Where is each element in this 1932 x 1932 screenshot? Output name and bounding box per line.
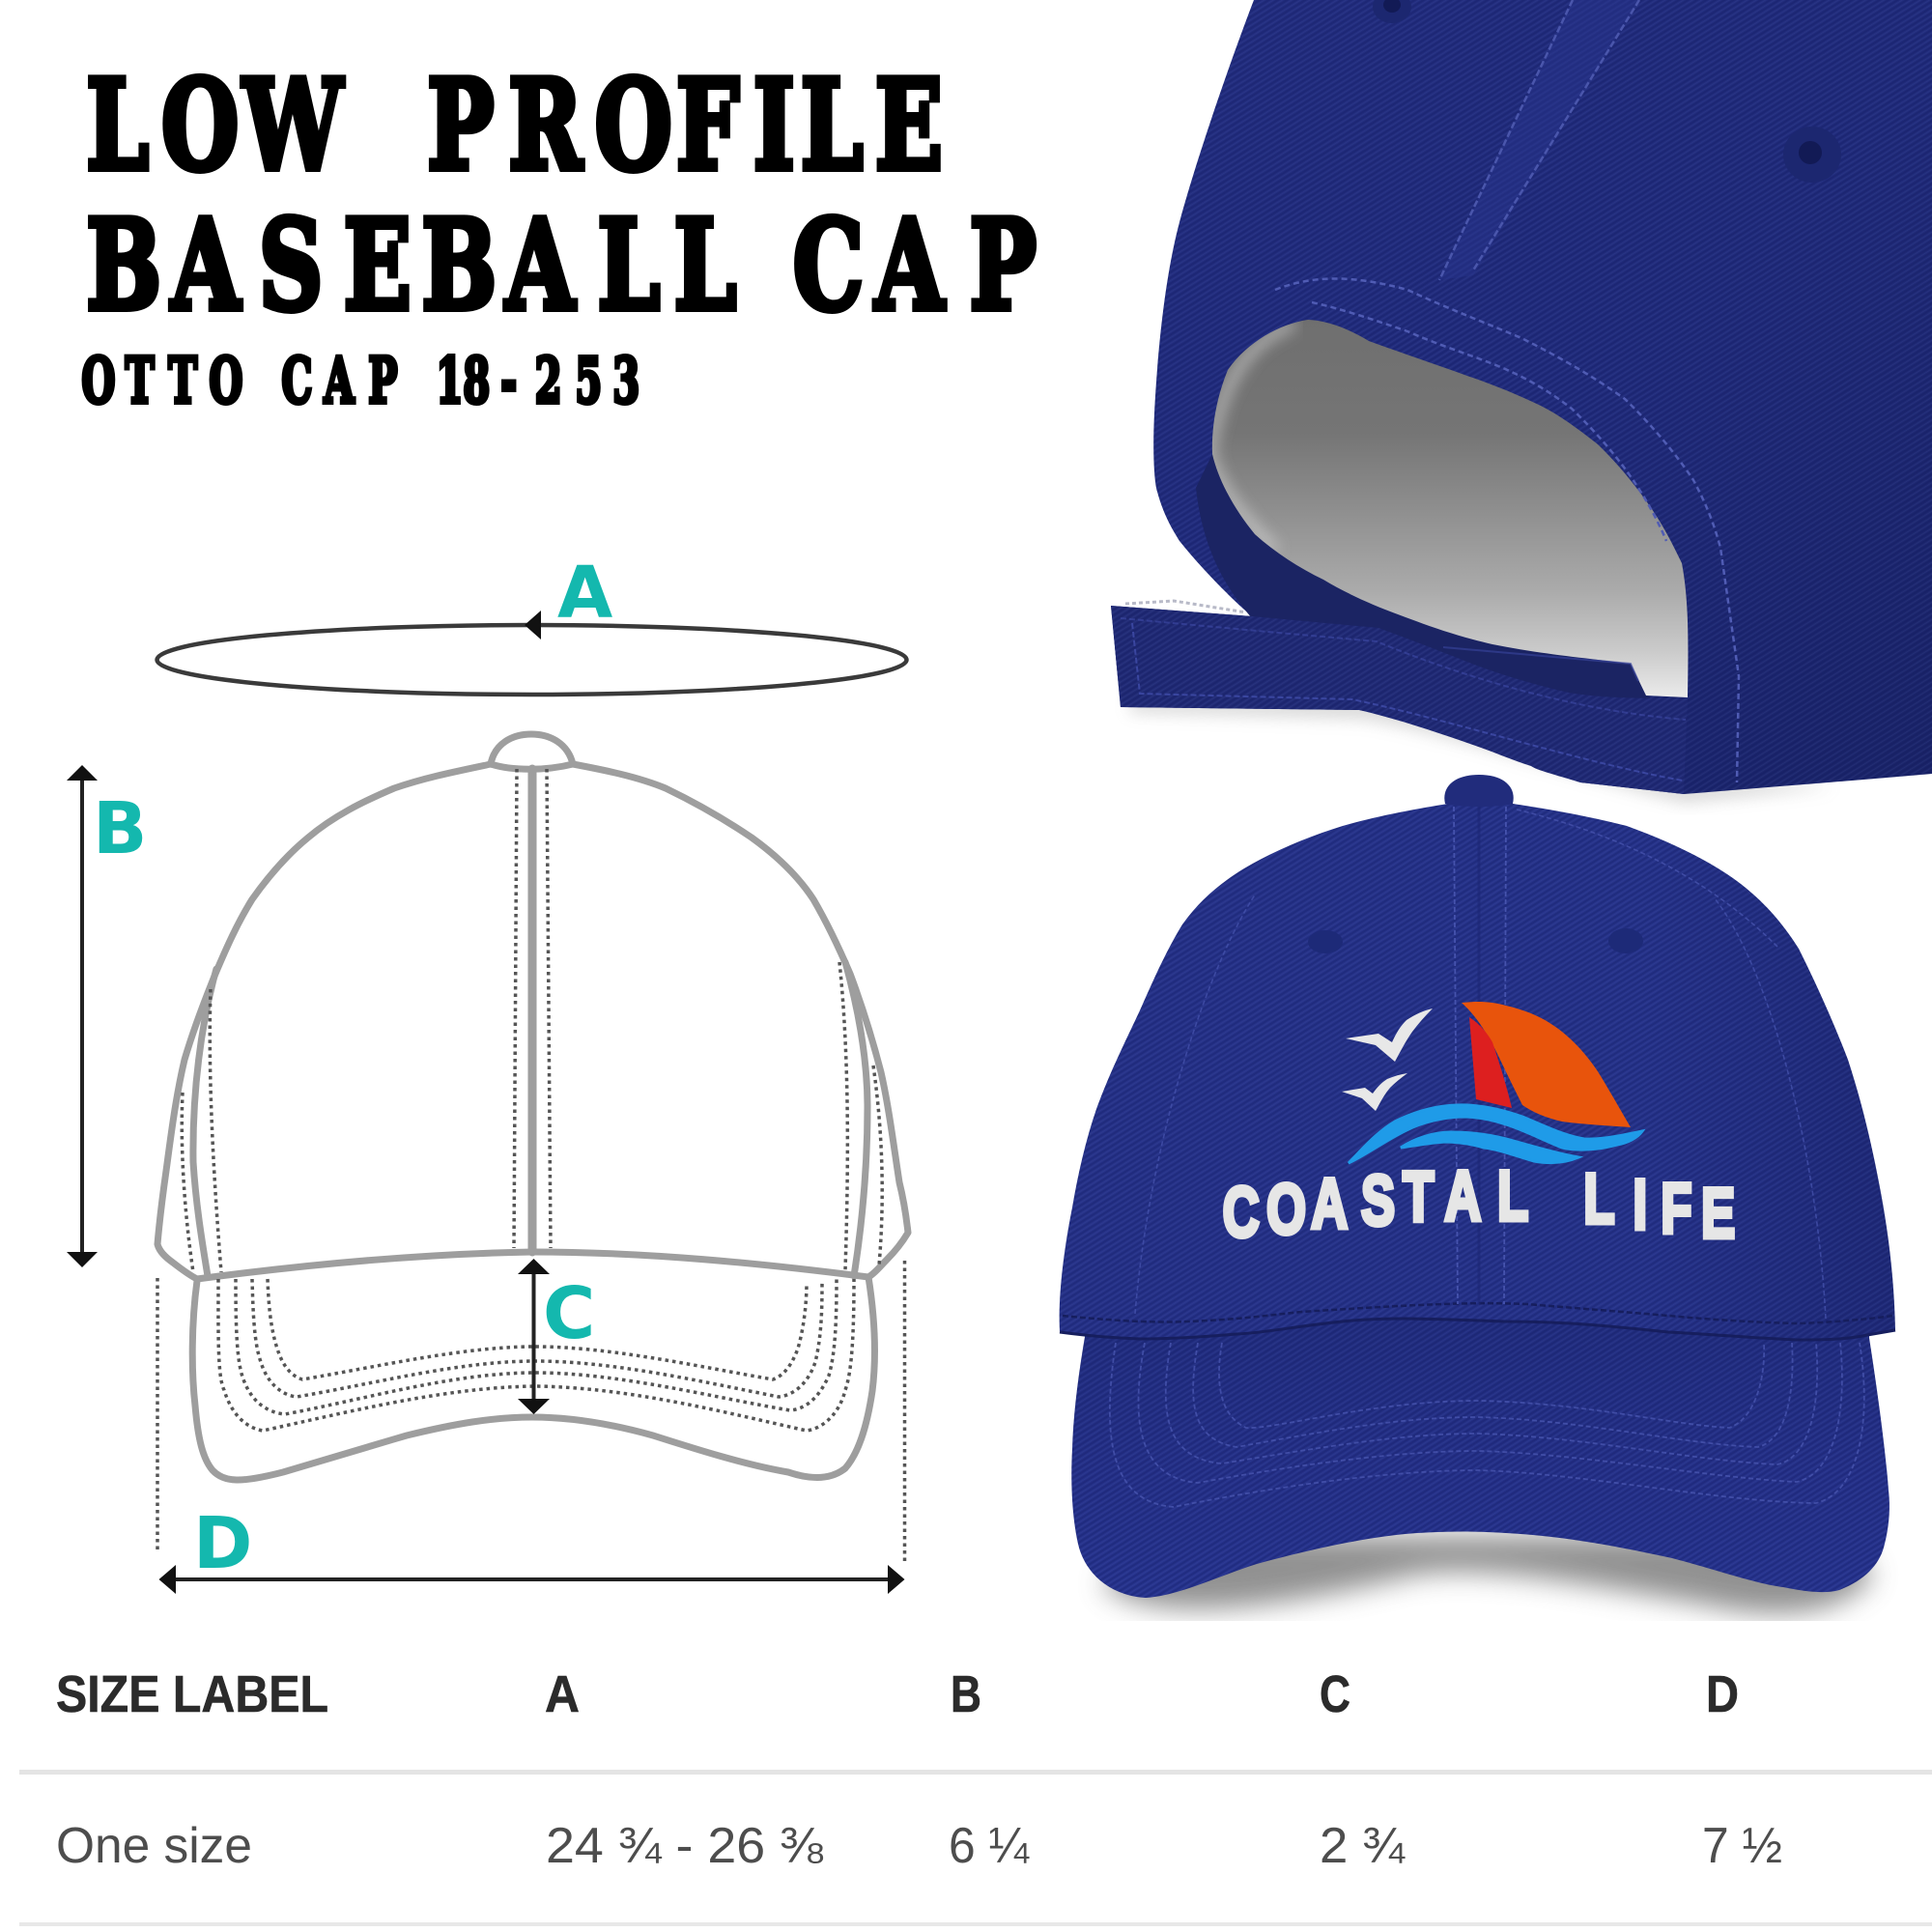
table header: C bbox=[1320, 1665, 1350, 1723]
photo: rear view of cap bbox=[1111, 0, 1932, 804]
visor bbox=[1071, 1294, 1889, 1598]
table row: One size bbox=[56, 1818, 252, 1874]
table header: B bbox=[951, 1665, 981, 1723]
table row: 6 ¼ bbox=[949, 1818, 1030, 1874]
brim seam bbox=[1060, 1303, 1895, 1340]
depth arrow C bbox=[518, 1259, 550, 1414]
title bbox=[86, 53, 1037, 338]
title: LOW PROFILE bbox=[86, 53, 943, 198]
eyelet right bbox=[1783, 127, 1841, 183]
table row: 24 ¾ - 26 ⅜ bbox=[546, 1818, 824, 1874]
visor shadow bbox=[1101, 1536, 1874, 1613]
size table bbox=[19, 1665, 1932, 1926]
table row bbox=[56, 1818, 1782, 1874]
table row: 7 ½ bbox=[1702, 1818, 1782, 1874]
cap outline drawing bbox=[157, 734, 908, 1480]
adjustable strap bbox=[1111, 601, 1688, 794]
logo: birds bbox=[1342, 1009, 1433, 1111]
label D: D bbox=[193, 1502, 252, 1585]
width arrow D bbox=[158, 1565, 904, 1594]
circumference ellipse A bbox=[156, 611, 906, 695]
table header: D bbox=[1706, 1665, 1739, 1723]
button bbox=[1444, 775, 1514, 807]
sweatband bbox=[1196, 454, 1654, 715]
table row: 2 ¾ bbox=[1320, 1818, 1406, 1874]
eyelet top bbox=[1373, 0, 1411, 23]
crown seams bbox=[1454, 807, 1506, 1304]
cap opening bbox=[1209, 320, 1688, 697]
title: BASEBALL CAP bbox=[86, 193, 1037, 338]
height arrow B bbox=[67, 765, 98, 1267]
table header: A bbox=[545, 1665, 580, 1723]
rear cap body bbox=[1111, 0, 1932, 794]
size diagram bbox=[67, 552, 908, 1594]
logo: sail bbox=[1462, 1002, 1631, 1127]
photo: front view of cap bbox=[1060, 775, 1895, 1613]
strap soft shadow bbox=[1130, 696, 1835, 804]
crown bbox=[1060, 804, 1895, 1339]
table header bbox=[56, 1665, 1739, 1723]
subtitle: OTTO CAP 18-253 bbox=[81, 343, 639, 417]
eyelets bbox=[1308, 928, 1643, 953]
visor stitching bbox=[1110, 1343, 1864, 1507]
label C: C bbox=[543, 1272, 595, 1355]
label B: B bbox=[93, 787, 147, 870]
logo: brand text: COASTAL LIFE bbox=[1223, 1157, 1735, 1253]
seam bands and stitching bbox=[1439, 0, 1639, 280]
table header: SIZE LABEL bbox=[56, 1665, 328, 1723]
dotted stitching bbox=[157, 769, 904, 1563]
label A: A bbox=[557, 552, 612, 635]
logo: waves bbox=[1349, 1105, 1642, 1163]
